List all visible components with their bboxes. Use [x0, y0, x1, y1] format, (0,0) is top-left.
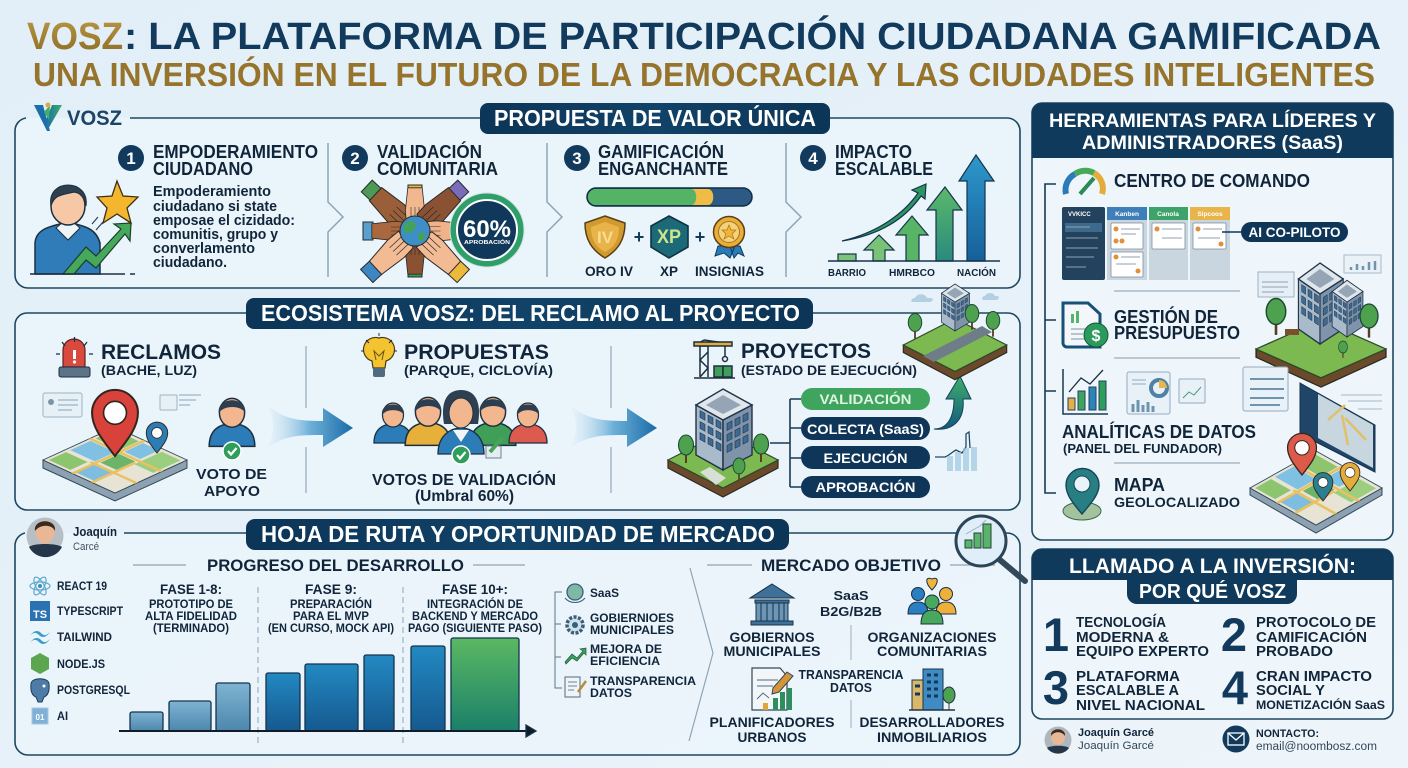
label: MUNICIPALES	[724, 643, 820, 659]
transparencia: DATOS	[590, 688, 632, 700]
reason 1: 1	[1043, 608, 1069, 661]
panel header: HERRAMIENTAS PARA LÍDERES Y	[1049, 109, 1376, 132]
icon: developer buildings	[909, 669, 955, 710]
badge labels: XP	[660, 263, 678, 279]
chart: growth arrows	[828, 155, 1000, 261]
reason 3	[1043, 661, 1205, 714]
reason 4: MONETIZACIÓN SaaS	[1256, 697, 1385, 712]
node	[31, 653, 105, 674]
reason 4: CRAN IMPACTO	[1256, 669, 1372, 685]
heading pill: ECOSISTEMA VOSZ: DEL RECLAMO AL PROYECTO	[261, 300, 800, 326]
body 1	[153, 184, 295, 271]
reason 2: 2	[1221, 608, 1247, 661]
progress bar	[587, 188, 752, 206]
gobiernos: MUNICIPALES	[590, 625, 674, 637]
stage: colecta	[801, 417, 930, 440]
center label: B2G/B2B	[820, 604, 882, 619]
arrow: up	[934, 376, 971, 429]
separators	[328, 143, 801, 277]
stage: ejecución: EJECUCIÓN	[824, 449, 908, 466]
phase 10+: INTEGRACIÓN DE	[427, 598, 523, 611]
item 4	[800, 142, 1000, 279]
label: ORGANIZACIONES	[868, 629, 996, 645]
reason 4	[1222, 661, 1385, 714]
typescript: TYPESCRIPT	[57, 604, 124, 618]
heading 1: CIUDADANO	[153, 159, 253, 179]
phase 9: PARA EL MVP	[293, 611, 369, 623]
illustration: finished park	[903, 284, 1007, 380]
icon: planner	[752, 668, 793, 710]
market heading: MERCADO OBJETIVO	[761, 556, 941, 575]
column: propuestas	[361, 333, 556, 505]
reason 1: EQUIPO EXPERTO	[1076, 644, 1209, 660]
reason 1: MODERNA &	[1076, 630, 1170, 646]
label	[710, 714, 834, 745]
kanban dashboard: Canola	[1157, 211, 1179, 218]
bracket	[1045, 184, 1056, 493]
heading 3	[598, 141, 728, 179]
title line 1: VOSZ	[27, 16, 123, 58]
panel header: LLAMADO A LA INVERSIÓN:	[1069, 554, 1356, 578]
column: proyectos	[668, 284, 1007, 498]
heading pill: HOJA DE RUTA Y OPORTUNIDAD DE MERCADO	[261, 521, 775, 547]
center label	[798, 667, 904, 695]
label: (Umbral 60%)	[415, 488, 514, 505]
heading 4	[835, 142, 933, 179]
icon: budget document	[1063, 303, 1108, 347]
badge labels	[585, 263, 764, 279]
heading 2: VALIDACIÓN	[377, 141, 482, 162]
heading: mapa: GEOLOCALIZADO	[1114, 494, 1240, 510]
icon: budget document: $	[1092, 328, 1101, 345]
founder avatar: Carcé	[73, 541, 99, 553]
typescript: TS	[33, 609, 47, 621]
react	[30, 575, 107, 597]
body 1: ciudadano si state	[153, 199, 277, 215]
heading 4: IMPACTO	[835, 142, 912, 162]
mini chart	[935, 432, 977, 471]
reason 2: PROTOCOLO DE	[1256, 615, 1376, 631]
heading: analíticas	[1062, 421, 1256, 456]
label	[868, 629, 996, 659]
panel header	[1032, 103, 1393, 158]
badge: oro IV: IV	[597, 228, 614, 247]
icon: bulb	[361, 333, 397, 377]
AI copilot tag	[1222, 222, 1348, 242]
heading 1: EMPODERAMIENTO	[153, 142, 318, 162]
kanban dashboard: VVKICC	[1068, 212, 1091, 218]
label: VOTOS DE VALIDACIÓN	[372, 471, 556, 489]
logo VOSZ	[34, 102, 122, 131]
heading: gestión: GESTIÓN DE	[1114, 306, 1218, 327]
tailwind	[30, 630, 112, 644]
panel: herramientas	[1032, 103, 1393, 540]
heading: PROYECTOS	[741, 340, 871, 363]
voters group	[374, 390, 547, 464]
chart cards	[1127, 367, 1288, 414]
saas: SaaS	[590, 588, 619, 600]
item 3	[564, 141, 764, 279]
market grid	[710, 578, 1004, 745]
footer: founder: Joaquín Garcé	[1078, 740, 1154, 752]
phase 10+	[408, 581, 542, 635]
heading: gestión	[1114, 306, 1240, 343]
number 4: 4	[808, 149, 818, 168]
typescript	[30, 601, 124, 621]
illustration: isometric city block	[1256, 263, 1386, 387]
stage: colecta: COLECTA (SaaS)	[807, 421, 924, 437]
postgres	[31, 679, 130, 702]
reason 4: SOCIAL Y	[1256, 683, 1325, 699]
panel: llamado a la inversión	[1032, 549, 1393, 719]
icon: magnifier	[956, 516, 1025, 581]
dashed dividers	[258, 587, 403, 745]
illustration: geo map	[1250, 433, 1382, 533]
heading	[741, 340, 917, 378]
label: COMUNITARIAS	[877, 643, 987, 659]
reason 3: PLATAFORMA	[1076, 669, 1181, 685]
heading 3: ENGANCHANTE	[598, 159, 728, 179]
center label: DATOS	[830, 680, 872, 695]
icon: crane	[694, 340, 735, 378]
center label: TRANSPARENCIA	[798, 667, 904, 682]
number 1	[118, 145, 144, 171]
phase 9: (EN CURSO, MOCK API)	[268, 623, 394, 635]
icon: community	[908, 578, 956, 624]
reason 1	[1043, 608, 1209, 661]
founder avatar	[26, 518, 117, 557]
illustration: isometric building	[668, 389, 778, 497]
heading: mapa: MAPA	[1114, 475, 1165, 495]
label: APOYO	[204, 483, 260, 500]
heading: centro de comando: CENTRO DE COMANDO	[1114, 171, 1310, 191]
number 3	[564, 145, 590, 171]
ai	[32, 708, 68, 724]
reason 2: CAMIFICACIÓN	[1256, 628, 1367, 646]
body 1: Empoderamiento	[153, 184, 271, 200]
label	[196, 466, 267, 500]
eficiencia: EFICIENCIA	[590, 656, 660, 668]
label: VOTO DE	[196, 466, 267, 483]
number 4	[800, 145, 826, 171]
icon: government	[750, 584, 794, 625]
heading: (BACHE, LUZ)	[101, 362, 197, 378]
footer: founder	[1044, 726, 1154, 754]
badge labels: INSIGNIAS	[695, 263, 764, 279]
footer: contact	[1222, 726, 1377, 753]
reason 2: PROBADO	[1256, 644, 1333, 660]
kanban dashboard	[1062, 207, 1230, 280]
reason 2	[1221, 608, 1376, 661]
number 2	[342, 145, 368, 171]
stage: ejecución	[801, 446, 930, 469]
ai: 01	[36, 713, 45, 722]
phase 9	[268, 581, 394, 635]
footer: contact: NONTACTO:	[1256, 728, 1319, 740]
icon: person with star and arrow	[30, 181, 138, 274]
body 1: ciudadano.	[153, 255, 227, 271]
card: window	[1258, 272, 1294, 297]
phase 10+: BACKEND Y MERCADO	[412, 611, 538, 623]
stage: aprobación: APROBACIÓN	[816, 478, 916, 495]
gauge: 60% approval: APROBACIÓN	[464, 238, 510, 246]
label: INMOBILIARIOS	[877, 729, 987, 745]
AI copilot tag: AI CO-PILOTO	[1248, 225, 1340, 240]
body 1: converlamento	[153, 241, 255, 257]
title line 2: UNA INVERSIÓN EN EL FUTURO DE LA DEMOCRACIA Y LAS CIUDADES INTELIGENTES	[33, 56, 1375, 93]
heading 4: ESCALABLE	[835, 159, 933, 179]
badge: XP	[651, 216, 688, 258]
benefits list	[555, 584, 696, 700]
heading: (PARQUE, CICLOVÍA)	[404, 362, 553, 378]
label: URBANOS	[738, 729, 806, 745]
center label: SaaS	[834, 588, 869, 603]
panel: hoja de ruta	[15, 516, 1025, 755]
label: DESARROLLADORES	[860, 714, 1004, 730]
gobiernos	[567, 613, 674, 637]
founder avatar: Joaquín	[73, 525, 117, 539]
badge: XP: XP	[657, 227, 681, 248]
heading: analíticas: (PANEL DEL FUNDADOR)	[1063, 441, 1222, 456]
plus: +	[634, 227, 644, 247]
phase 10+: PAGO (SIGUIENTE PASO)	[408, 623, 542, 635]
heading 3: GAMIFICACIÓN	[598, 141, 724, 162]
panel: ecosistema	[15, 284, 1020, 510]
label	[724, 629, 820, 659]
plus: +	[695, 227, 705, 247]
badge labels: ORO IV	[585, 263, 634, 279]
progress heading: PROGRESO DEL DESARROLLO	[207, 556, 464, 575]
heading 1	[153, 142, 318, 179]
divider chevron	[689, 568, 713, 741]
panel header: ADMINISTRADORES (SaaS)	[1082, 132, 1343, 154]
badge: oro IV	[585, 216, 625, 258]
eficiencia: MEJORA DE	[590, 644, 662, 656]
heading 2: COMUNITARIA	[377, 159, 498, 179]
heading pill: PROPUESTA DE VALOR ÚNICA	[494, 104, 816, 131]
body 1: emposae el cizidado:	[153, 213, 295, 229]
icon: joined hands and globe	[359, 177, 471, 285]
ai: AI	[57, 709, 68, 723]
screen: founder panel	[1300, 383, 1382, 472]
tech stack list	[30, 575, 130, 724]
separators	[1114, 291, 1240, 463]
kanban dashboard: Sipcoos	[1197, 211, 1223, 218]
transparencia	[565, 676, 696, 700]
label: PLANIFICADORES	[710, 714, 834, 730]
icon: location pin	[1063, 468, 1101, 520]
heading: (ESTADO DE EJECUCIÓN)	[741, 361, 917, 378]
logo VOSZ: VOSZ	[67, 107, 122, 130]
label: GOBIERNOS	[730, 629, 814, 645]
arrow	[570, 405, 657, 448]
chart labels	[828, 266, 996, 279]
phase 9: FASE 9:	[305, 581, 357, 597]
gobiernos: GOBIERNIOES	[590, 613, 674, 625]
icon: analytics	[1063, 369, 1108, 414]
stage: validación	[801, 388, 930, 410]
comment cards	[43, 393, 201, 417]
item 2	[342, 141, 524, 285]
title	[27, 14, 1381, 93]
heading: PROPUESTAS	[404, 341, 549, 364]
phase 10+: FASE 10+:	[442, 581, 508, 597]
postgres: POSTGRESQL	[57, 683, 130, 697]
transparencia: TRANSPARENCIA	[590, 676, 696, 688]
arrow	[267, 405, 353, 448]
reason 3: ESCALABLE A	[1076, 683, 1180, 699]
react: REACT 19	[57, 579, 107, 593]
kanban dashboard: Kanben	[1115, 211, 1139, 218]
phase 1-8	[145, 581, 237, 635]
reason 3: 3	[1043, 661, 1069, 714]
phase 9: PREPARACIÓN	[290, 598, 372, 611]
gauge: 60% approval	[450, 193, 524, 267]
chart labels: NACIÓN	[957, 266, 996, 279]
center label	[820, 588, 882, 619]
heading: mapa	[1114, 475, 1240, 510]
column: reclamos	[43, 337, 267, 501]
panel header	[1032, 549, 1393, 604]
gauge: 60% approval: 60%	[463, 216, 511, 243]
bar chart	[119, 638, 536, 737]
number 2: 2	[350, 149, 360, 168]
body 1: comunitis, grupo y	[153, 227, 278, 243]
heading: RECLAMOS	[101, 341, 221, 364]
panel: propuesta de valor	[15, 102, 1020, 288]
heading: analíticas: ANALÍTICAS DE DATOS	[1062, 421, 1256, 442]
footer: contact: email@noombosz.com	[1256, 741, 1377, 753]
card: bars	[1344, 255, 1381, 273]
voter	[209, 398, 255, 460]
node: NODE.JS	[57, 657, 105, 671]
item 1	[30, 142, 318, 274]
number 1: 1	[126, 149, 136, 168]
saas	[565, 584, 619, 602]
title line 1: : LA PLATAFORMA DE PARTICIPACIÓN CIUDADANA GAMIFICADA	[124, 14, 1381, 58]
separators	[306, 346, 611, 493]
badge: medal	[714, 216, 744, 258]
label	[372, 471, 556, 505]
heading	[404, 341, 553, 378]
connector	[770, 399, 801, 487]
reason 4: 4	[1222, 661, 1248, 714]
icon: alarm	[56, 337, 93, 377]
icon: gauge	[1066, 171, 1103, 194]
heading: gestión: PRESUPUESTO	[1114, 323, 1240, 343]
phase 1-8: FASE 1-8:	[160, 581, 222, 597]
heading	[101, 341, 221, 378]
eficiencia	[565, 644, 662, 668]
number 3: 3	[572, 149, 582, 168]
stage: validación: VALIDACIÓN	[820, 390, 912, 407]
heading 2	[377, 141, 498, 179]
icon: map with pins	[43, 390, 187, 501]
phase 1-8: PROTOTIPO DE	[149, 599, 233, 611]
phase 1-8: (TERMINADO)	[153, 623, 229, 635]
reason 3: NIVEL NACIONAL	[1076, 698, 1205, 714]
reason 1: TECNOLOGÍA	[1076, 614, 1166, 631]
tailwind: TAILWIND	[57, 630, 112, 644]
label	[860, 714, 1004, 745]
footer: founder: Joaquín Garcé	[1078, 727, 1154, 739]
panel header: POR QUÉ VOSZ	[1139, 580, 1286, 603]
chart labels: BARRIO	[828, 267, 866, 279]
phase 1-8: ALTA FIDELIDAD	[145, 611, 237, 623]
stage: aprobación	[801, 476, 930, 498]
chart labels: HMRBCO	[889, 267, 935, 279]
